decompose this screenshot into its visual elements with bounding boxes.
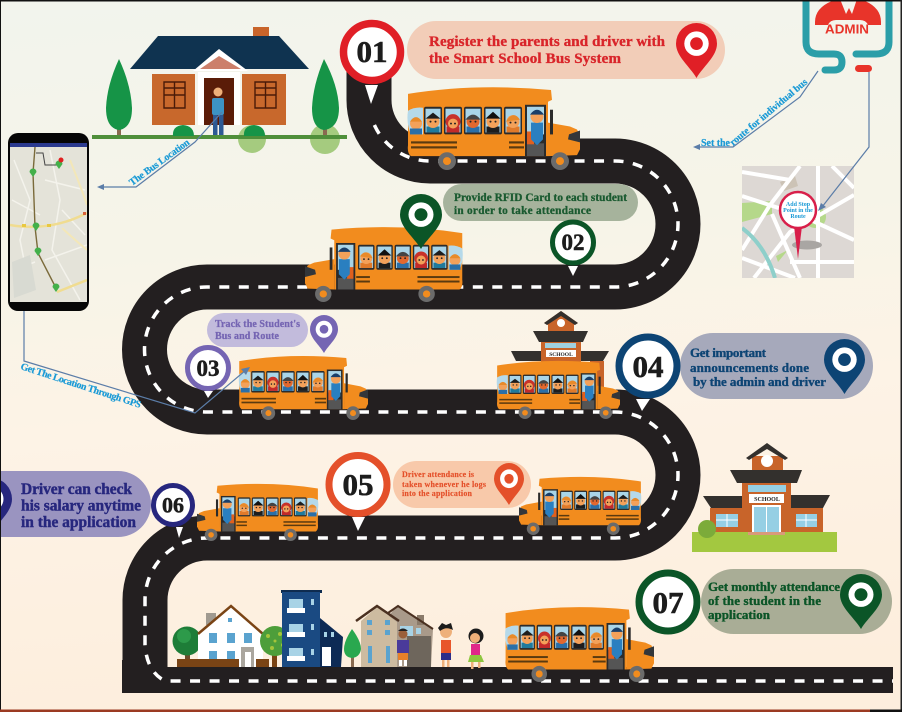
map pin text: Add Stop <box>786 202 811 208</box>
bus 7 <box>505 607 654 682</box>
panel: step 5 callout <box>393 461 531 508</box>
step 2 text: Provide RFID Card to each student <box>454 192 627 204</box>
icon: round tree <box>172 626 202 667</box>
icon: boy purple shirt <box>397 628 409 666</box>
bus 2 <box>305 227 463 302</box>
step 4 marker <box>619 337 677 411</box>
panel: route map <box>742 166 854 278</box>
arrow: GPS line <box>19 311 250 413</box>
icon: blue building <box>281 590 343 667</box>
step 6 text: Driver can check <box>21 481 132 498</box>
label: set the route: Set the <box>701 138 731 149</box>
step 1 marker <box>344 24 400 104</box>
step 7 text: Get monthly attendance <box>708 579 840 594</box>
step 6 text: his salary anytime <box>21 498 141 514</box>
school building <box>692 443 837 552</box>
step 5 marker <box>329 456 387 531</box>
icon: small tree <box>344 629 361 667</box>
step 7 text: of the student in the <box>708 593 821 608</box>
admin monitor <box>806 0 889 72</box>
sign: school: SCHOOL <box>754 497 780 503</box>
label: the bus location: The Bus Location <box>127 137 192 188</box>
step 6 marker <box>154 486 192 538</box>
bus 1 <box>407 87 580 170</box>
panel: step 4 callout <box>680 333 873 399</box>
step 2 marker <box>552 222 594 276</box>
step 1 text: Register the parents and driver with <box>429 34 666 50</box>
step 2 marker: 02 <box>562 230 584 255</box>
step 5 text: taken whenever he logs <box>402 480 486 489</box>
step 4 marker: 04 <box>632 349 664 384</box>
map pin text: Route <box>790 214 806 220</box>
icon: fruit tree <box>260 626 290 667</box>
step 3 marker <box>188 348 228 398</box>
admin label: ADMIN <box>825 22 869 36</box>
road <box>122 60 893 693</box>
icon: twin houses <box>356 605 433 667</box>
step 5 marker: 05 <box>342 467 374 502</box>
arrow: admin to map <box>818 72 869 211</box>
step 4 text: announcements done <box>690 360 809 375</box>
icon: left tree <box>106 59 132 137</box>
icon: step 5 pin <box>494 463 524 505</box>
icon: white house <box>177 606 269 667</box>
panel: step 1 callout <box>407 21 725 79</box>
bus 3 <box>239 356 368 420</box>
bus 4 <box>497 361 620 419</box>
icon: step 2 pin <box>400 194 442 249</box>
step 3 text: Bus and Route <box>215 331 280 342</box>
label: route for individual bus: route for individual bus <box>728 77 810 148</box>
step 4 text: Get important <box>690 345 767 360</box>
step 6 marker: 06 <box>162 492 184 518</box>
icon: step 3 pin <box>310 315 338 353</box>
step 1 marker: 01 <box>356 34 388 69</box>
panel: step 6 callout <box>0 471 151 537</box>
map pin text: Point in the <box>783 208 813 214</box>
bus 5 <box>519 477 641 535</box>
panel: phone with map <box>8 133 89 311</box>
icon: right tree <box>310 59 340 154</box>
icon: step 4 pin <box>824 339 865 394</box>
step 7 text: application <box>708 607 771 622</box>
label: GPS: Get The Location Through GPS <box>19 361 143 411</box>
step 5 text: Driver attendance is <box>402 470 474 479</box>
icon: step 1 pin <box>676 23 717 78</box>
icon: boy orange shirt <box>438 623 453 667</box>
step 7 marker <box>639 573 697 631</box>
step 5 text: into the application <box>402 489 473 498</box>
town scene <box>172 590 484 669</box>
school behind bus 4 <box>511 311 609 391</box>
icon: admin figure <box>815 0 881 25</box>
step 6 text: in the application <box>21 514 136 531</box>
step 2 text: in order to take attendance <box>454 205 591 217</box>
step 4 text: by the admin and driver <box>693 374 826 389</box>
step 3 marker: 03 <box>196 356 220 381</box>
sign: school: SCHOOL <box>549 352 573 358</box>
arrow: the bus location <box>97 112 222 190</box>
panel: step 3 callout <box>207 313 338 353</box>
step 7 marker: 07 <box>652 585 684 620</box>
panel: step 7 callout <box>701 569 892 634</box>
icon: step 6 pin <box>0 478 12 534</box>
arrow: set the route <box>693 71 818 150</box>
house with person and trees <box>92 27 347 154</box>
icon: step 7 pin <box>840 574 882 629</box>
panel: step 2 callout <box>443 184 638 221</box>
icon: person at door <box>212 88 224 135</box>
icon: girl pink shirt <box>468 628 484 669</box>
step 3 text: Track the Student's <box>215 319 300 330</box>
bus 6 <box>197 484 318 541</box>
step 1 text: the Smart School Bus System <box>429 51 622 67</box>
